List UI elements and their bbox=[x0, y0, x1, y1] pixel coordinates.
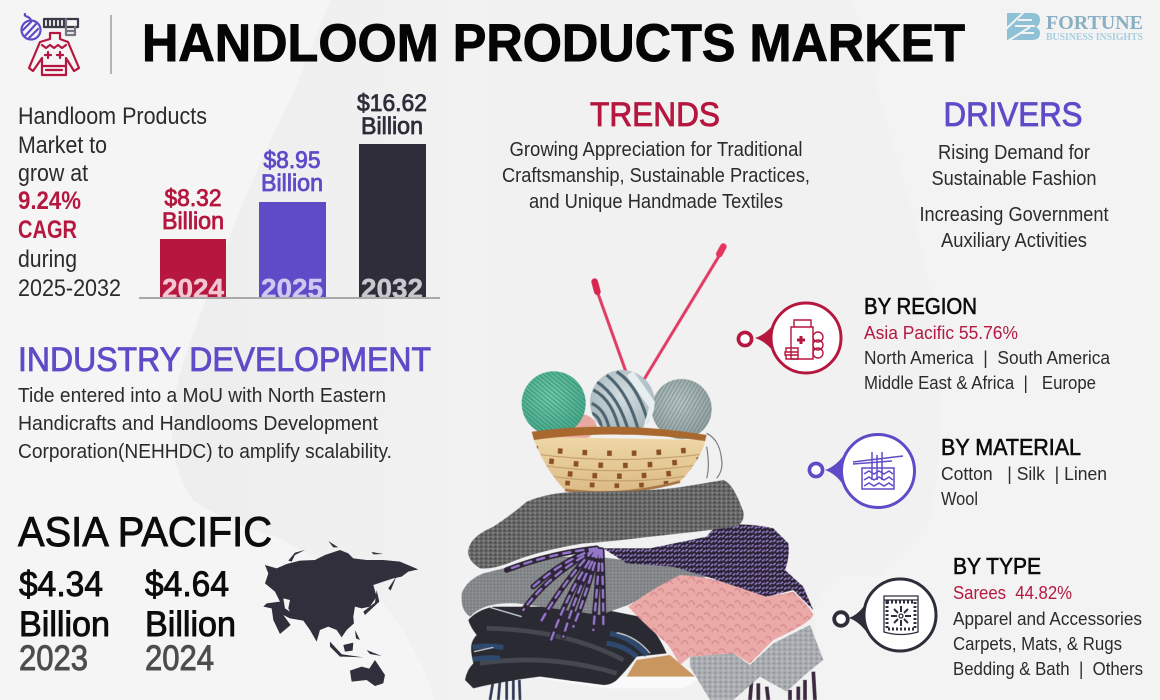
grey knit sweater, middle bbox=[461, 557, 707, 617]
logo: Fortune Business Insights: BUSINESS INSIGHTS bbox=[1046, 32, 1143, 43]
type list bbox=[953, 583, 1143, 679]
text block: CAGR summary: during bbox=[18, 246, 77, 273]
logo text: FORTUNE bbox=[1046, 12, 1143, 34]
icon: region pin bbox=[738, 303, 841, 373]
heading: by material: BY MATERIAL bbox=[941, 434, 1081, 460]
heading: asia pacific: ASIA PACIFIC bbox=[18, 508, 272, 555]
purple scarf bbox=[603, 524, 813, 610]
bar 2032: 2032 bbox=[361, 273, 423, 304]
bar 2025 bbox=[259, 147, 326, 304]
text block: CAGR summary: CAGR bbox=[18, 216, 77, 244]
region list: Middle East & Africa | Europe bbox=[864, 373, 1096, 393]
icon: sweater, ornament and scarf bbox=[22, 14, 79, 75]
material list: Wool bbox=[941, 489, 978, 509]
icon: type pin bbox=[834, 579, 936, 651]
bar 2025: 2025 bbox=[261, 273, 323, 304]
heading: trends: TRENDS bbox=[590, 96, 720, 134]
dark striped scarf bbox=[465, 607, 667, 688]
panel: drivers bbox=[920, 96, 1109, 252]
text block: CAGR summary: Market to bbox=[18, 132, 107, 159]
title: HANDLOOM PRODUCTS MARKET bbox=[142, 14, 965, 73]
value 2024: Billion bbox=[145, 605, 236, 644]
trends description: and Unique Handmade Textiles bbox=[529, 191, 783, 213]
yarn balls bbox=[522, 370, 712, 441]
trends description: Growing Appreciation for Traditional bbox=[510, 139, 802, 161]
bar 2024 bbox=[160, 185, 226, 304]
value 2024: 2024 bbox=[145, 639, 214, 678]
heading: by region: BY REGION bbox=[864, 293, 977, 319]
pale grey scarf, lower right bbox=[690, 625, 823, 700]
bar 2032: Billion bbox=[361, 113, 423, 140]
logo mark bbox=[1006, 12, 1040, 41]
knitting needles bbox=[595, 247, 723, 383]
stool bbox=[530, 655, 703, 688]
region list: Asia Pacific 55.76% bbox=[864, 323, 1018, 343]
drivers list: Auxiliary Activities bbox=[941, 230, 1087, 252]
bottom fringes bbox=[490, 672, 815, 700]
bar 2024: $8.32 bbox=[164, 185, 222, 212]
panel: asia pacific bbox=[18, 508, 418, 686]
photo: yarn basket on stacked knitwear bbox=[461, 247, 823, 700]
text block: CAGR summary bbox=[18, 103, 207, 302]
bar 2032 bbox=[357, 90, 427, 304]
panel: by material bbox=[809, 434, 1107, 509]
wicker basket bbox=[532, 427, 722, 492]
value 2023: 2023 bbox=[19, 639, 88, 678]
region list: North America | South America bbox=[864, 348, 1111, 368]
text block: CAGR summary: grow at bbox=[18, 160, 88, 187]
bar 2025: Billion bbox=[261, 170, 323, 197]
purple fringe bbox=[507, 548, 603, 643]
logo: Fortune Business Insights bbox=[1006, 12, 1143, 43]
panel: by region bbox=[738, 293, 1111, 393]
panel: by type bbox=[834, 553, 1143, 679]
type list: Carpets, Mats, & Rugs bbox=[953, 634, 1122, 654]
panel: industry development bbox=[18, 341, 431, 463]
type list: Apparel and Accessories bbox=[953, 609, 1142, 629]
type list: Sarees 44.82% bbox=[953, 583, 1072, 603]
bar 2024: Billion bbox=[162, 208, 224, 235]
drivers list: Increasing Government bbox=[920, 204, 1109, 226]
drivers list: Rising Demand for bbox=[938, 142, 1090, 164]
text block: CAGR summary: 9.24% bbox=[18, 187, 81, 215]
divider bbox=[110, 15, 112, 74]
industry development text: Tide entered into a MoU with North Eastern bbox=[18, 385, 386, 407]
value 2024: $4.64 bbox=[145, 565, 229, 604]
value 2024 bbox=[145, 565, 236, 678]
map: asia bbox=[263, 541, 418, 686]
drivers list: Sustainable Fashion bbox=[932, 168, 1096, 190]
heading: drivers: DRIVERS bbox=[944, 96, 1082, 134]
drivers list bbox=[920, 142, 1109, 252]
bar 2032: $16.62 bbox=[357, 90, 427, 117]
heading: by type: BY TYPE bbox=[953, 553, 1041, 579]
text block: CAGR summary: 2025-2032 bbox=[18, 275, 121, 302]
panel: trends bbox=[502, 96, 810, 213]
material list bbox=[941, 464, 1107, 509]
material list: Cotton | Silk | Linen bbox=[941, 464, 1107, 484]
trends description: Craftsmanship, Sustainable Practices, bbox=[502, 165, 810, 187]
region list bbox=[864, 323, 1111, 393]
heading: industry development: INDUSTRY DEVELOPMENT bbox=[18, 341, 431, 379]
icon: yarn ornament bbox=[22, 14, 40, 40]
bar chart: market size bbox=[139, 90, 440, 304]
icon: scarf bbox=[44, 19, 78, 35]
bar 2025: $8.95 bbox=[264, 147, 320, 174]
industry development text: Corporation(NEHHDC) to amplify scalability. bbox=[18, 441, 392, 463]
grey knit blanket, top bbox=[468, 480, 744, 569]
pink cable knit bbox=[628, 575, 813, 665]
industry development text bbox=[18, 385, 392, 463]
value 2023 bbox=[19, 565, 110, 678]
bar 2024: 2024 bbox=[162, 273, 224, 304]
type list: Bedding & Bath | Others bbox=[953, 659, 1143, 679]
icon: material pin bbox=[809, 434, 914, 508]
industry development text: Handicrafts and Handlooms Development bbox=[18, 413, 378, 435]
trends description bbox=[502, 139, 810, 213]
icon: sweater bbox=[29, 33, 79, 75]
text block: CAGR summary: Handloom Products bbox=[18, 103, 207, 130]
value 2023: $4.34 bbox=[19, 565, 103, 604]
value 2023: Billion bbox=[19, 605, 110, 644]
